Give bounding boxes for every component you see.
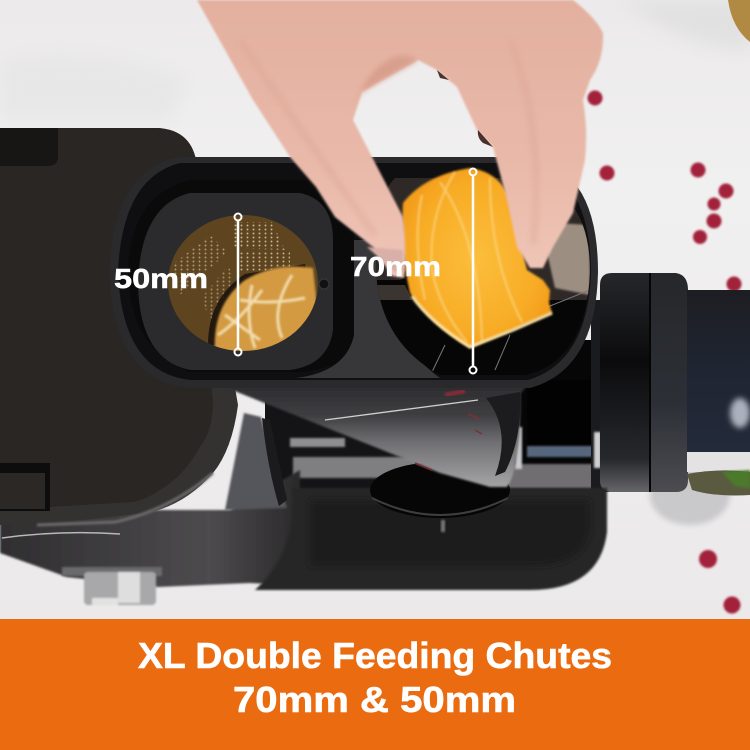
base shadow / reflection under collar [650, 465, 730, 525]
bowl corner [728, 0, 750, 42]
base chrome knob [62, 567, 162, 605]
base right section [255, 462, 607, 590]
main top panel [0, 128, 238, 525]
hand [197, 0, 603, 278]
small chute hole [168, 215, 318, 351]
side bracket [225, 413, 287, 510]
caption banner [0, 619, 750, 750]
central black shiny housing [265, 300, 610, 492]
left body base [0, 470, 300, 587]
50mm measurement line [234, 214, 242, 356]
70mm label: 70mm [350, 251, 441, 282]
collar ring [600, 273, 688, 492]
feeding chute housing [110, 157, 598, 388]
caption line 1: XL Double Feeding Chutes [138, 635, 612, 676]
upper hinge [0, 128, 58, 166]
70mm measurement line [470, 168, 476, 374]
plate around large chute [296, 240, 440, 378]
lower hinge [0, 463, 50, 511]
caption line 2: 70mm & 50mm [233, 679, 516, 720]
large chute [376, 178, 590, 375]
large peeled orange [402, 168, 552, 348]
orange in small chute [215, 266, 322, 352]
small chute plate [138, 193, 333, 370]
50mm label: 50mm [114, 263, 208, 294]
chute funnel [212, 382, 530, 487]
right motor cylinder [687, 290, 750, 495]
silver shaft [290, 438, 433, 478]
pomegranate seeds [588, 90, 742, 614]
